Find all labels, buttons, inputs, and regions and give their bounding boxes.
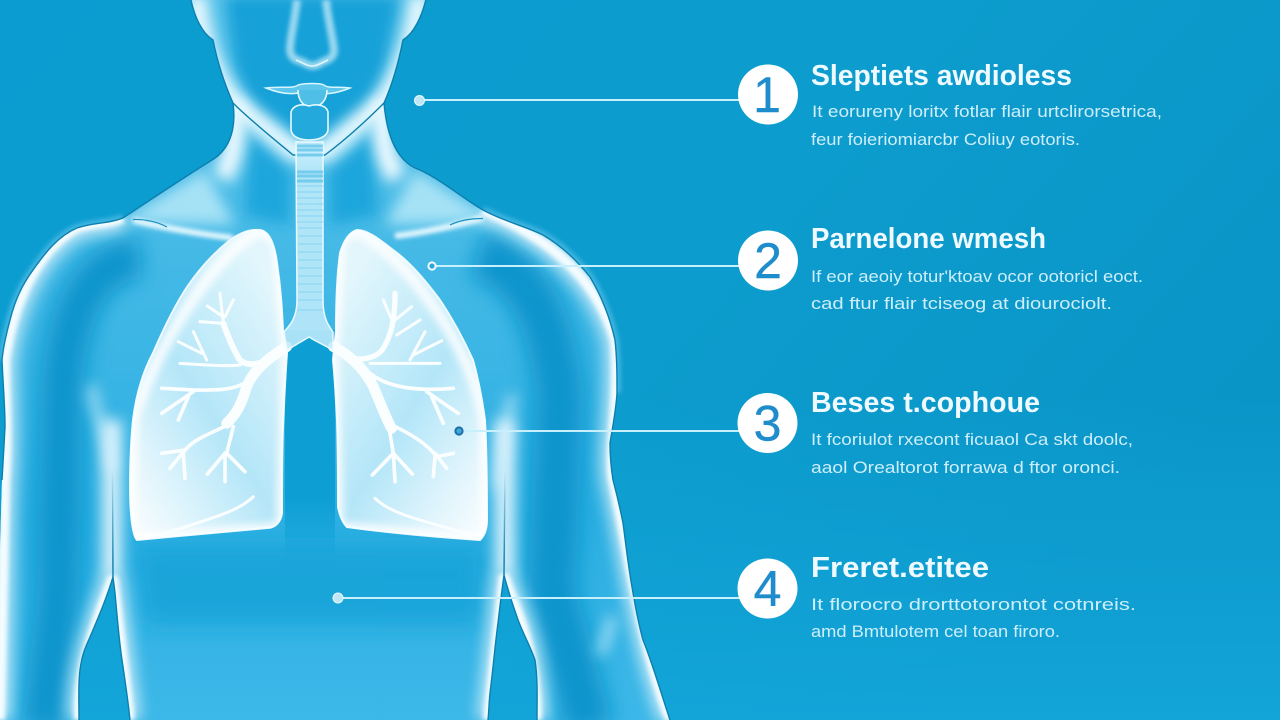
description 3: aaol Orealtorot forrawa d ftor oronci.	[811, 458, 1120, 477]
face and neck shading	[120, 0, 497, 225]
nose	[290, 0, 334, 66]
trachea	[284, 90, 333, 350]
number badge 3	[738, 393, 798, 453]
heading 2: Parnelone wmesh	[811, 223, 1046, 255]
heading 4: Freret.etitee	[811, 552, 989, 584]
heading 3: Beses t.cophoue	[811, 387, 1040, 419]
description 2	[811, 267, 1143, 313]
description 2: cad ftur flair tciseog at diourociolt.	[811, 294, 1112, 313]
arm and torso divider lines	[112, 470, 505, 577]
number badge 3: 3	[754, 396, 781, 452]
step 3	[738, 387, 1133, 477]
description 1: It eorureny loritx fotlar flair urtclirorsetrica,	[812, 102, 1162, 121]
number badge 4: 4	[754, 561, 781, 617]
clavicle notches	[133, 218, 483, 227]
mouth	[266, 84, 350, 94]
number badge 4	[738, 558, 798, 618]
right lung	[333, 230, 487, 540]
number badge 1	[738, 64, 798, 124]
description 1	[811, 102, 1162, 149]
number badge 2	[738, 230, 798, 290]
callout 2: connector line	[428, 262, 740, 270]
description 2: If eor aeoiy totur'ktoav ocor ootoricl eoct.	[811, 267, 1143, 286]
step 4	[738, 552, 1136, 641]
callout 1: connector line	[414, 96, 740, 106]
pectoral glow	[92, 385, 613, 655]
edge glow	[0, 210, 670, 720]
description 3	[811, 430, 1133, 477]
chest centre shading	[285, 330, 335, 543]
jaw line	[233, 103, 384, 155]
body outer halo	[2, 210, 617, 393]
step 1	[738, 60, 1162, 149]
number badge 1: 1	[753, 67, 781, 123]
description 4	[811, 595, 1136, 641]
heading 1: Sleptiets awdioless	[811, 60, 1072, 92]
left bronchial tree	[157, 293, 287, 537]
description 1: feur foieriomiarcbr Coliuy eotoris.	[811, 130, 1080, 149]
right bronchial tree	[333, 293, 477, 537]
collarbones	[133, 218, 483, 238]
description 4: It florocro drorttotorontot cotnreis.	[811, 595, 1136, 614]
human body silhouette	[0, 0, 695, 720]
number badge 2: 2	[754, 233, 782, 289]
description 3: It fcoriulot rxecont ficuaol Ca skt doolc,	[811, 430, 1133, 449]
body base fill and shading	[0, 0, 695, 720]
left lung	[130, 230, 287, 540]
body outline	[2, 0, 670, 720]
step 2	[738, 223, 1143, 313]
description 4: amd Bmtulotem cel toan firoro.	[811, 622, 1060, 641]
arm dark bands	[42, 254, 590, 720]
callout 4: connector line	[333, 593, 740, 603]
callout 3: connector line	[455, 427, 740, 435]
